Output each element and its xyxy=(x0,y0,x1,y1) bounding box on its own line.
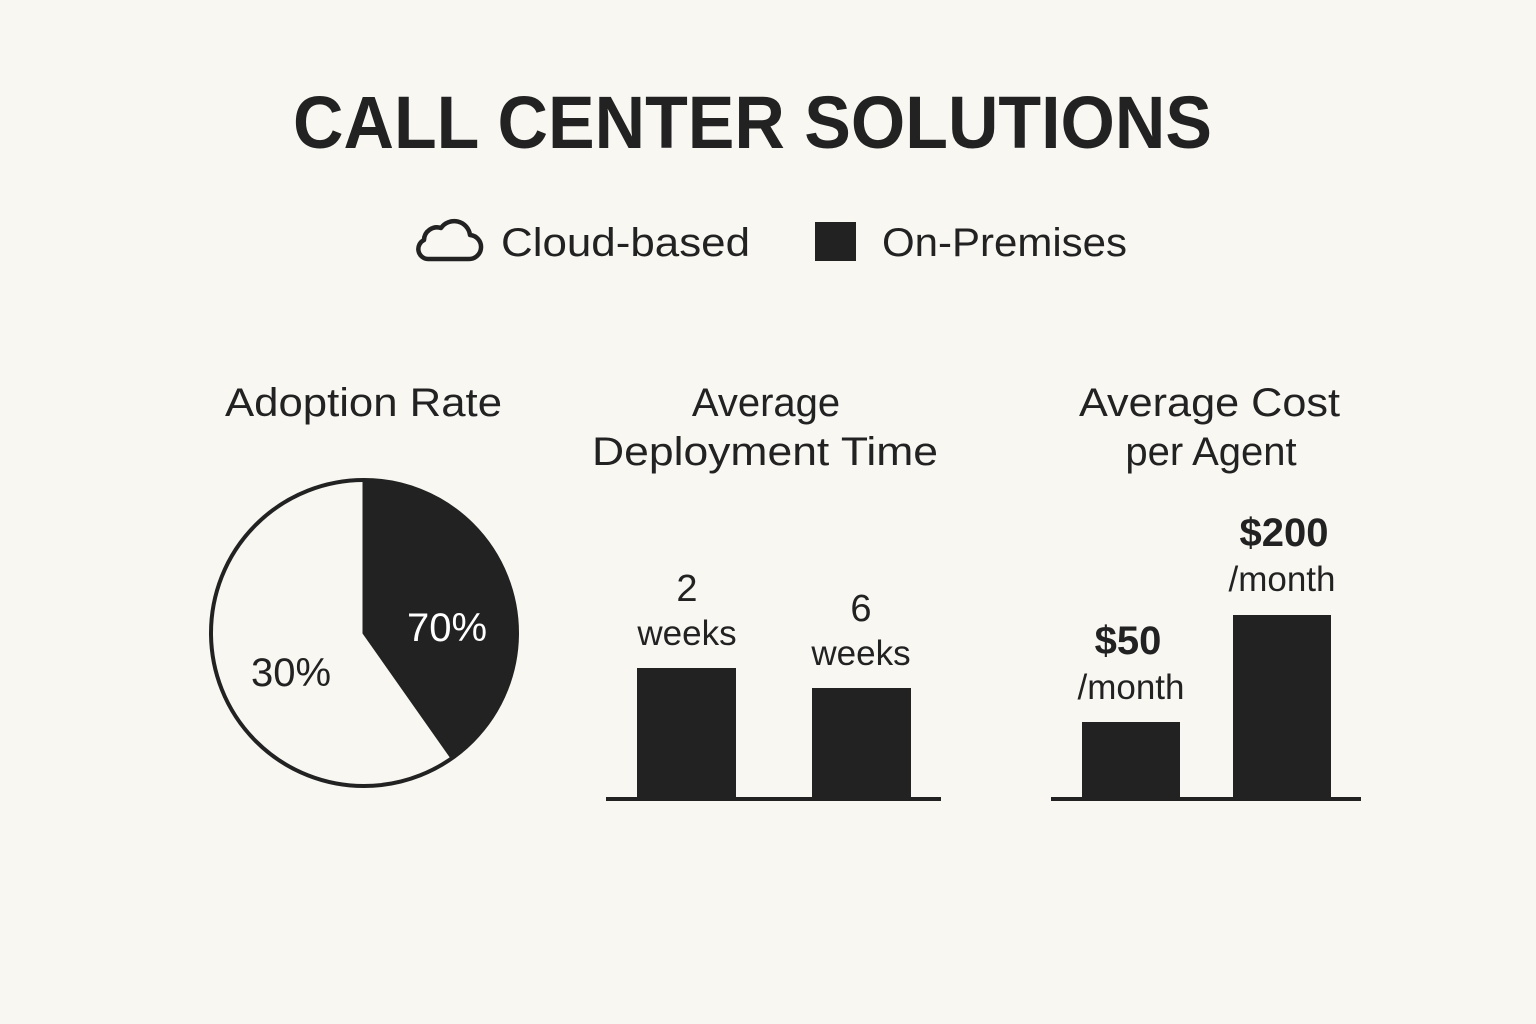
bar chart: cost: $200 xyxy=(1240,511,1328,555)
legend xyxy=(418,221,1127,265)
legend label: on-premises: On-Premises xyxy=(882,221,1127,265)
heading: adoption rate: Adoption Rate xyxy=(225,381,502,425)
title: CALL CENTER SOLUTIONS xyxy=(293,81,1212,164)
bar chart: cost xyxy=(1051,511,1361,801)
bar chart: deployment: 2 xyxy=(676,568,698,610)
icon: cloud xyxy=(418,221,481,259)
panel: deployment time: Deployment Time xyxy=(592,430,938,474)
bar chart: deployment: 6 xyxy=(850,588,872,630)
heading: cost per agent: Average Cost xyxy=(1079,381,1340,425)
legend label: cloud-based: Cloud-based xyxy=(501,221,750,265)
panel: adoption rate xyxy=(211,381,517,786)
bar chart: cost: /month xyxy=(1228,560,1336,599)
icon: on-premises square xyxy=(815,222,856,261)
pie chart: 70% xyxy=(407,606,487,650)
heading: deployment time: Average xyxy=(692,381,840,425)
bar chart: deployment: weeks xyxy=(810,634,911,673)
bar chart: deployment: weeks xyxy=(636,614,737,653)
bar chart: cost: $50 xyxy=(1095,619,1161,663)
bar chart: cost: /month xyxy=(1078,668,1184,707)
bar chart: deployment xyxy=(606,568,941,801)
panel: deployment time xyxy=(592,381,941,801)
panel: cost per agent: per Agent xyxy=(1125,430,1297,474)
panel: cost per agent xyxy=(1051,381,1361,801)
pie chart: 30% xyxy=(251,651,331,695)
pie chart xyxy=(211,480,517,786)
